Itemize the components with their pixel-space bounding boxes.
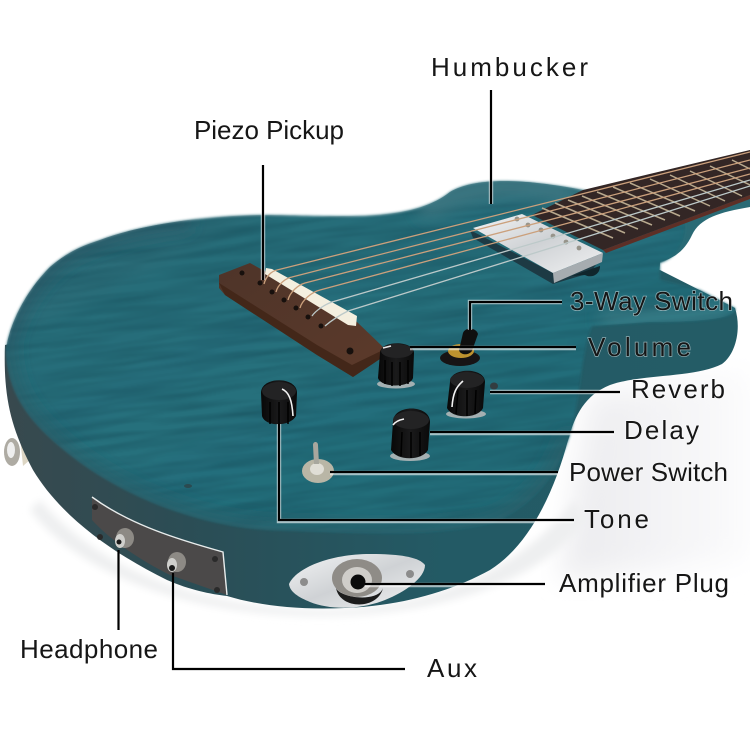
volume knob — [377, 343, 415, 388]
label: Amplifier Plug: Amplifier Plug — [559, 568, 729, 598]
label: Aux: Aux — [427, 653, 477, 683]
body top face — [6, 181, 735, 533]
guitar floor shadow — [30, 500, 585, 616]
aux jack — [167, 552, 186, 572]
control-plate on side — [92, 497, 227, 595]
strap button — [4, 433, 32, 466]
humbucker pickup — [470, 214, 603, 284]
tone knob — [261, 380, 297, 426]
label: Headphone: Headphone — [20, 634, 158, 664]
label: Delay: Delay — [624, 415, 699, 445]
guitar photo illustration — [0, 123, 750, 616]
wood grain — [8, 181, 710, 518]
label: Volume: Volume — [588, 332, 691, 362]
label: Humbucker: Humbucker — [431, 52, 588, 82]
label: Tone: Tone — [584, 504, 649, 534]
strings — [264, 152, 750, 326]
label: Power Switch: Power Switch — [569, 457, 728, 487]
saddle — [265, 268, 357, 326]
bridge — [219, 263, 383, 377]
soft edge shading — [6, 187, 730, 533]
dark knot in wood — [184, 484, 192, 488]
delay knob — [390, 408, 430, 461]
power switch — [302, 442, 334, 483]
fretboard — [532, 150, 750, 253]
leader lines — [118, 90, 620, 669]
label: Reverb: Reverb — [631, 374, 725, 404]
headphone jack — [115, 528, 134, 548]
label: Piezo Pickup: Piezo Pickup — [194, 115, 344, 145]
body side — [5, 270, 738, 608]
neck heel — [560, 190, 750, 300]
background shade at right — [560, 370, 750, 580]
reverb hole — [490, 382, 498, 390]
3-way switch — [440, 329, 480, 366]
reverb knob — [446, 371, 486, 418]
label: 3-Way Switch: 3-Way Switch — [570, 286, 733, 316]
amplifier plug plate — [289, 554, 425, 608]
